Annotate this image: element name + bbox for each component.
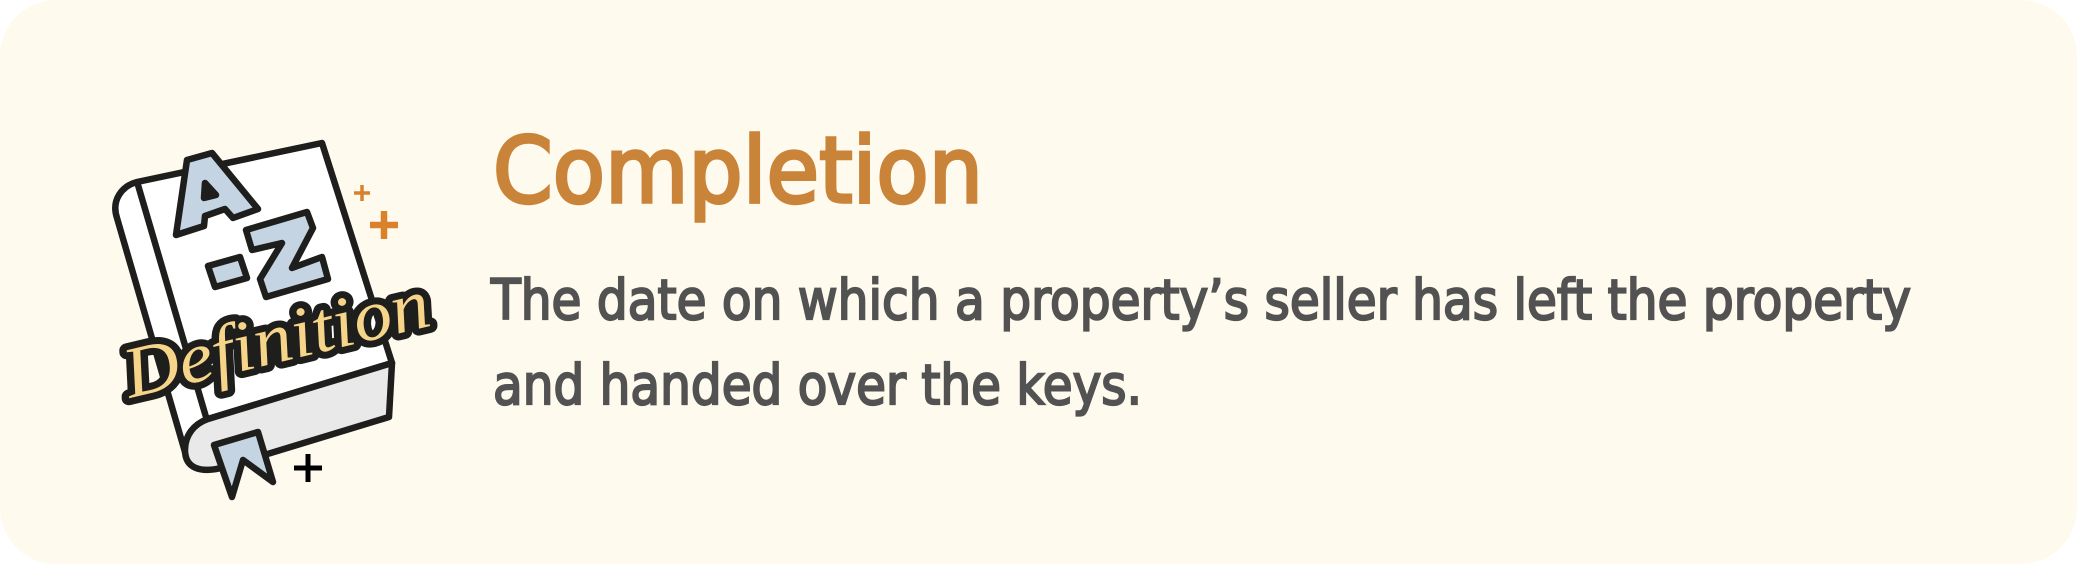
bookmark xyxy=(214,432,273,497)
definition line 2: and handed over the keys. xyxy=(493,353,1142,417)
sparkle: large orange plus xyxy=(370,211,398,239)
dash xyxy=(208,257,247,287)
icon: dictionary book xyxy=(115,143,392,497)
letter A counter xyxy=(204,183,216,198)
sparkle: black plus xyxy=(294,454,322,482)
page block xyxy=(185,363,392,470)
definition line 1: The date on which a property’s seller has left the property xyxy=(490,268,1911,332)
sparkle: small orange plus xyxy=(354,185,370,201)
title: Completion xyxy=(493,119,983,224)
definition text xyxy=(490,268,1911,417)
spine line xyxy=(138,185,206,417)
lettering outline: Definition xyxy=(114,263,437,414)
letter Z xyxy=(246,212,328,297)
letter A xyxy=(176,153,258,235)
lettering fill: Definition xyxy=(114,263,437,414)
lettering: Definition xyxy=(114,263,437,414)
book cover and pages xyxy=(115,143,392,452)
